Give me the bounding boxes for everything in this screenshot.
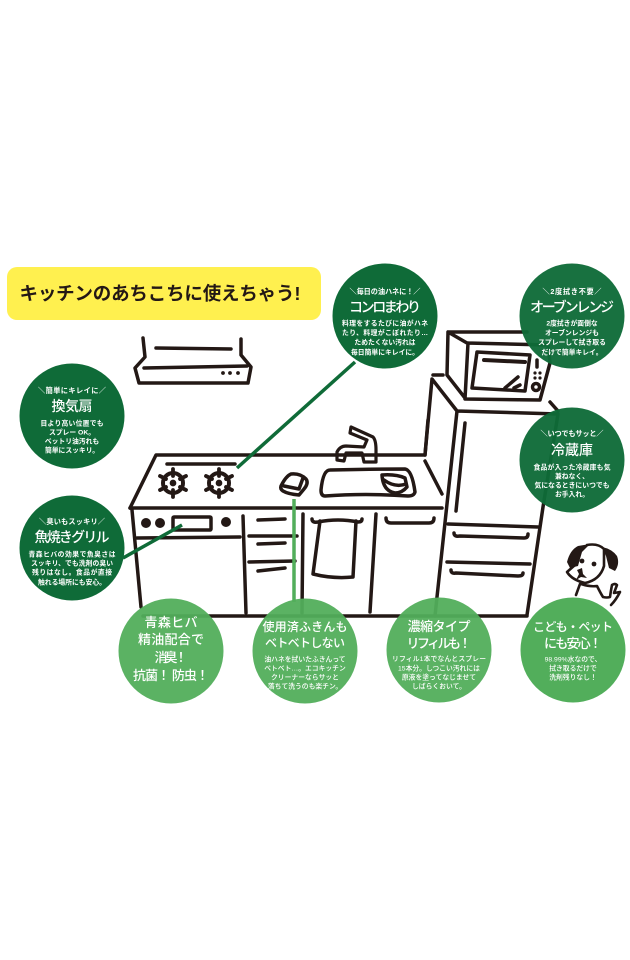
bubble: safe for kids and pets: にも安心！: [544, 636, 602, 651]
bubble: microwave oven: オーブンレンジ: [530, 299, 614, 315]
connector: grill bubble to grill: [123, 525, 182, 558]
title banner: [7, 267, 321, 320]
bubble: fish grill: スッキリ、でも洗剤の臭い: [31, 558, 113, 568]
icon: sink: [321, 469, 415, 496]
illustration: refrigerator: [425, 375, 558, 616]
bubble: concentrated refill: 15本分。しつこい汚れには: [398, 664, 480, 672]
bubble: concentrated refill: 濃縮タイプ: [408, 619, 470, 634]
icon: dish: [382, 475, 407, 493]
bubble: range hood: 目より高い位置でも: [40, 418, 104, 428]
icon: left burner: [160, 469, 186, 497]
bubble: stove area: たり、料理がこぼれたり…: [342, 328, 428, 337]
bubble: stove area: 毎日簡単にキレイに。: [351, 348, 419, 356]
bubble: fish grill: 青森ヒバの効果で魚臭さは: [28, 550, 116, 558]
bubble: concentrated refill: リフィルも！: [406, 636, 472, 651]
bubble: stove area: ためたくない汚れは: [354, 338, 416, 346]
bubble: range hood: ＼簡単にキレイに／: [38, 386, 106, 395]
bubble: refrigerator: 冷蔵庫: [551, 442, 593, 458]
bubble: fish grill: 触れる場所にも安心。: [38, 578, 106, 586]
bubble: refrigerator: ＼いつでもサッと／: [540, 429, 604, 438]
bubble: Aomori hiba oil: 精油配合で: [138, 632, 204, 647]
bubble: safe for kids and pets: こども・ペット: [533, 620, 613, 634]
bubble: refrigerator: 食品が入った冷蔵庫も気: [534, 462, 611, 472]
bubble: used cloths: 使用済ふきんも: [262, 619, 348, 634]
bubble: used cloths: 油ハネを拭いたふきんって: [264, 654, 346, 664]
bubble: concentrated refill: 原液を塗ってなじませて: [402, 672, 476, 682]
bubble: Aomori hiba oil: 消臭！: [154, 650, 188, 665]
bubble: fish grill: ＼臭いもスッキリ／: [39, 517, 105, 526]
bubble: fish grill: 残りはなし。食品が直接: [32, 568, 112, 576]
bubble: microwave oven: 2度拭きが面倒な: [546, 318, 598, 328]
bubble: used cloths: ベトベト…。エコキッチン: [264, 664, 346, 672]
bubble: refrigerator: [520, 408, 624, 512]
bubble: microwave oven: スプレーして拭き取る: [538, 338, 606, 346]
bubble: microwave oven: オーブンレンジも: [545, 328, 599, 337]
title banner: キッチンのあちこちに使えちゃう!: [20, 283, 300, 304]
icon: faucet: [337, 427, 376, 462]
bubble: stove area: 料理をするたびに油がハネ: [342, 318, 428, 328]
icon: right burner: [206, 469, 232, 497]
bubble: safe for kids and pets: 洗剤残りなし！: [549, 672, 597, 682]
illustration: microwave: [447, 332, 550, 400]
bubble: used cloths: ベトベトしない: [265, 636, 345, 650]
bubble: fish grill: [20, 496, 124, 600]
bubble: safe for kids and pets: 98.99%水なので、: [545, 654, 601, 664]
bubble: range hood: スプレー OK。: [49, 428, 95, 436]
bubble: fish grill: 魚焼きグリル: [34, 529, 110, 545]
bubble: range hood: ベットリ油汚れも: [45, 436, 99, 446]
bubble: microwave oven: [520, 264, 624, 368]
bubble: range hood: [20, 364, 124, 468]
bubble: safe for kids and pets: [520, 598, 626, 702]
bubble: stove area: コンロまわり: [349, 299, 421, 315]
connector: sponge to cloth bubble: [292, 499, 296, 602]
icon: sponge: [281, 474, 307, 495]
bubble: microwave oven: ＼2度拭き不要／: [542, 287, 602, 296]
bubble: microwave oven: だけで簡単キレイ。: [541, 348, 603, 356]
bubble: range hood: 換気扇: [52, 398, 92, 414]
bubble: safe for kids and pets: 拭き取るだけで: [549, 664, 597, 672]
bubble: Aomori hiba oil: 青森ヒバ: [144, 615, 198, 630]
bubble: refrigerator: 兼ねなく、: [555, 472, 589, 480]
bubble: range hood: 簡単にスッキリ。: [45, 446, 99, 454]
bubble: used cloths: 落ちて洗うのも楽チン。: [268, 682, 342, 690]
bubble: refrigerator: 気になるときにいつでも: [534, 480, 610, 490]
connector: range to stove bubble: [237, 362, 355, 468]
illustration: range hood: [135, 338, 251, 383]
bubble: concentrated refill: しばらくおいて。: [412, 682, 466, 690]
bubble: stove area: [332, 264, 438, 368]
bubble: refrigerator: お手入れ。: [555, 490, 589, 498]
bubble: used cloths: [252, 598, 358, 704]
illustration: dog: [567, 544, 620, 605]
illustration: kitchen counter: [130, 420, 527, 616]
bubble: concentrated refill: リフィル1本でなんとスプレー: [392, 654, 486, 663]
bubble: Aomori hiba oil: [118, 598, 224, 704]
bubble: stove area: ＼毎日の油ハネに！／: [350, 287, 420, 296]
bubble: concentrated refill: [386, 598, 492, 702]
bubble: used cloths: クリーナーならサッと: [271, 674, 339, 682]
bubble: Aomori hiba oil: 抗菌！ 防虫！: [133, 668, 209, 683]
